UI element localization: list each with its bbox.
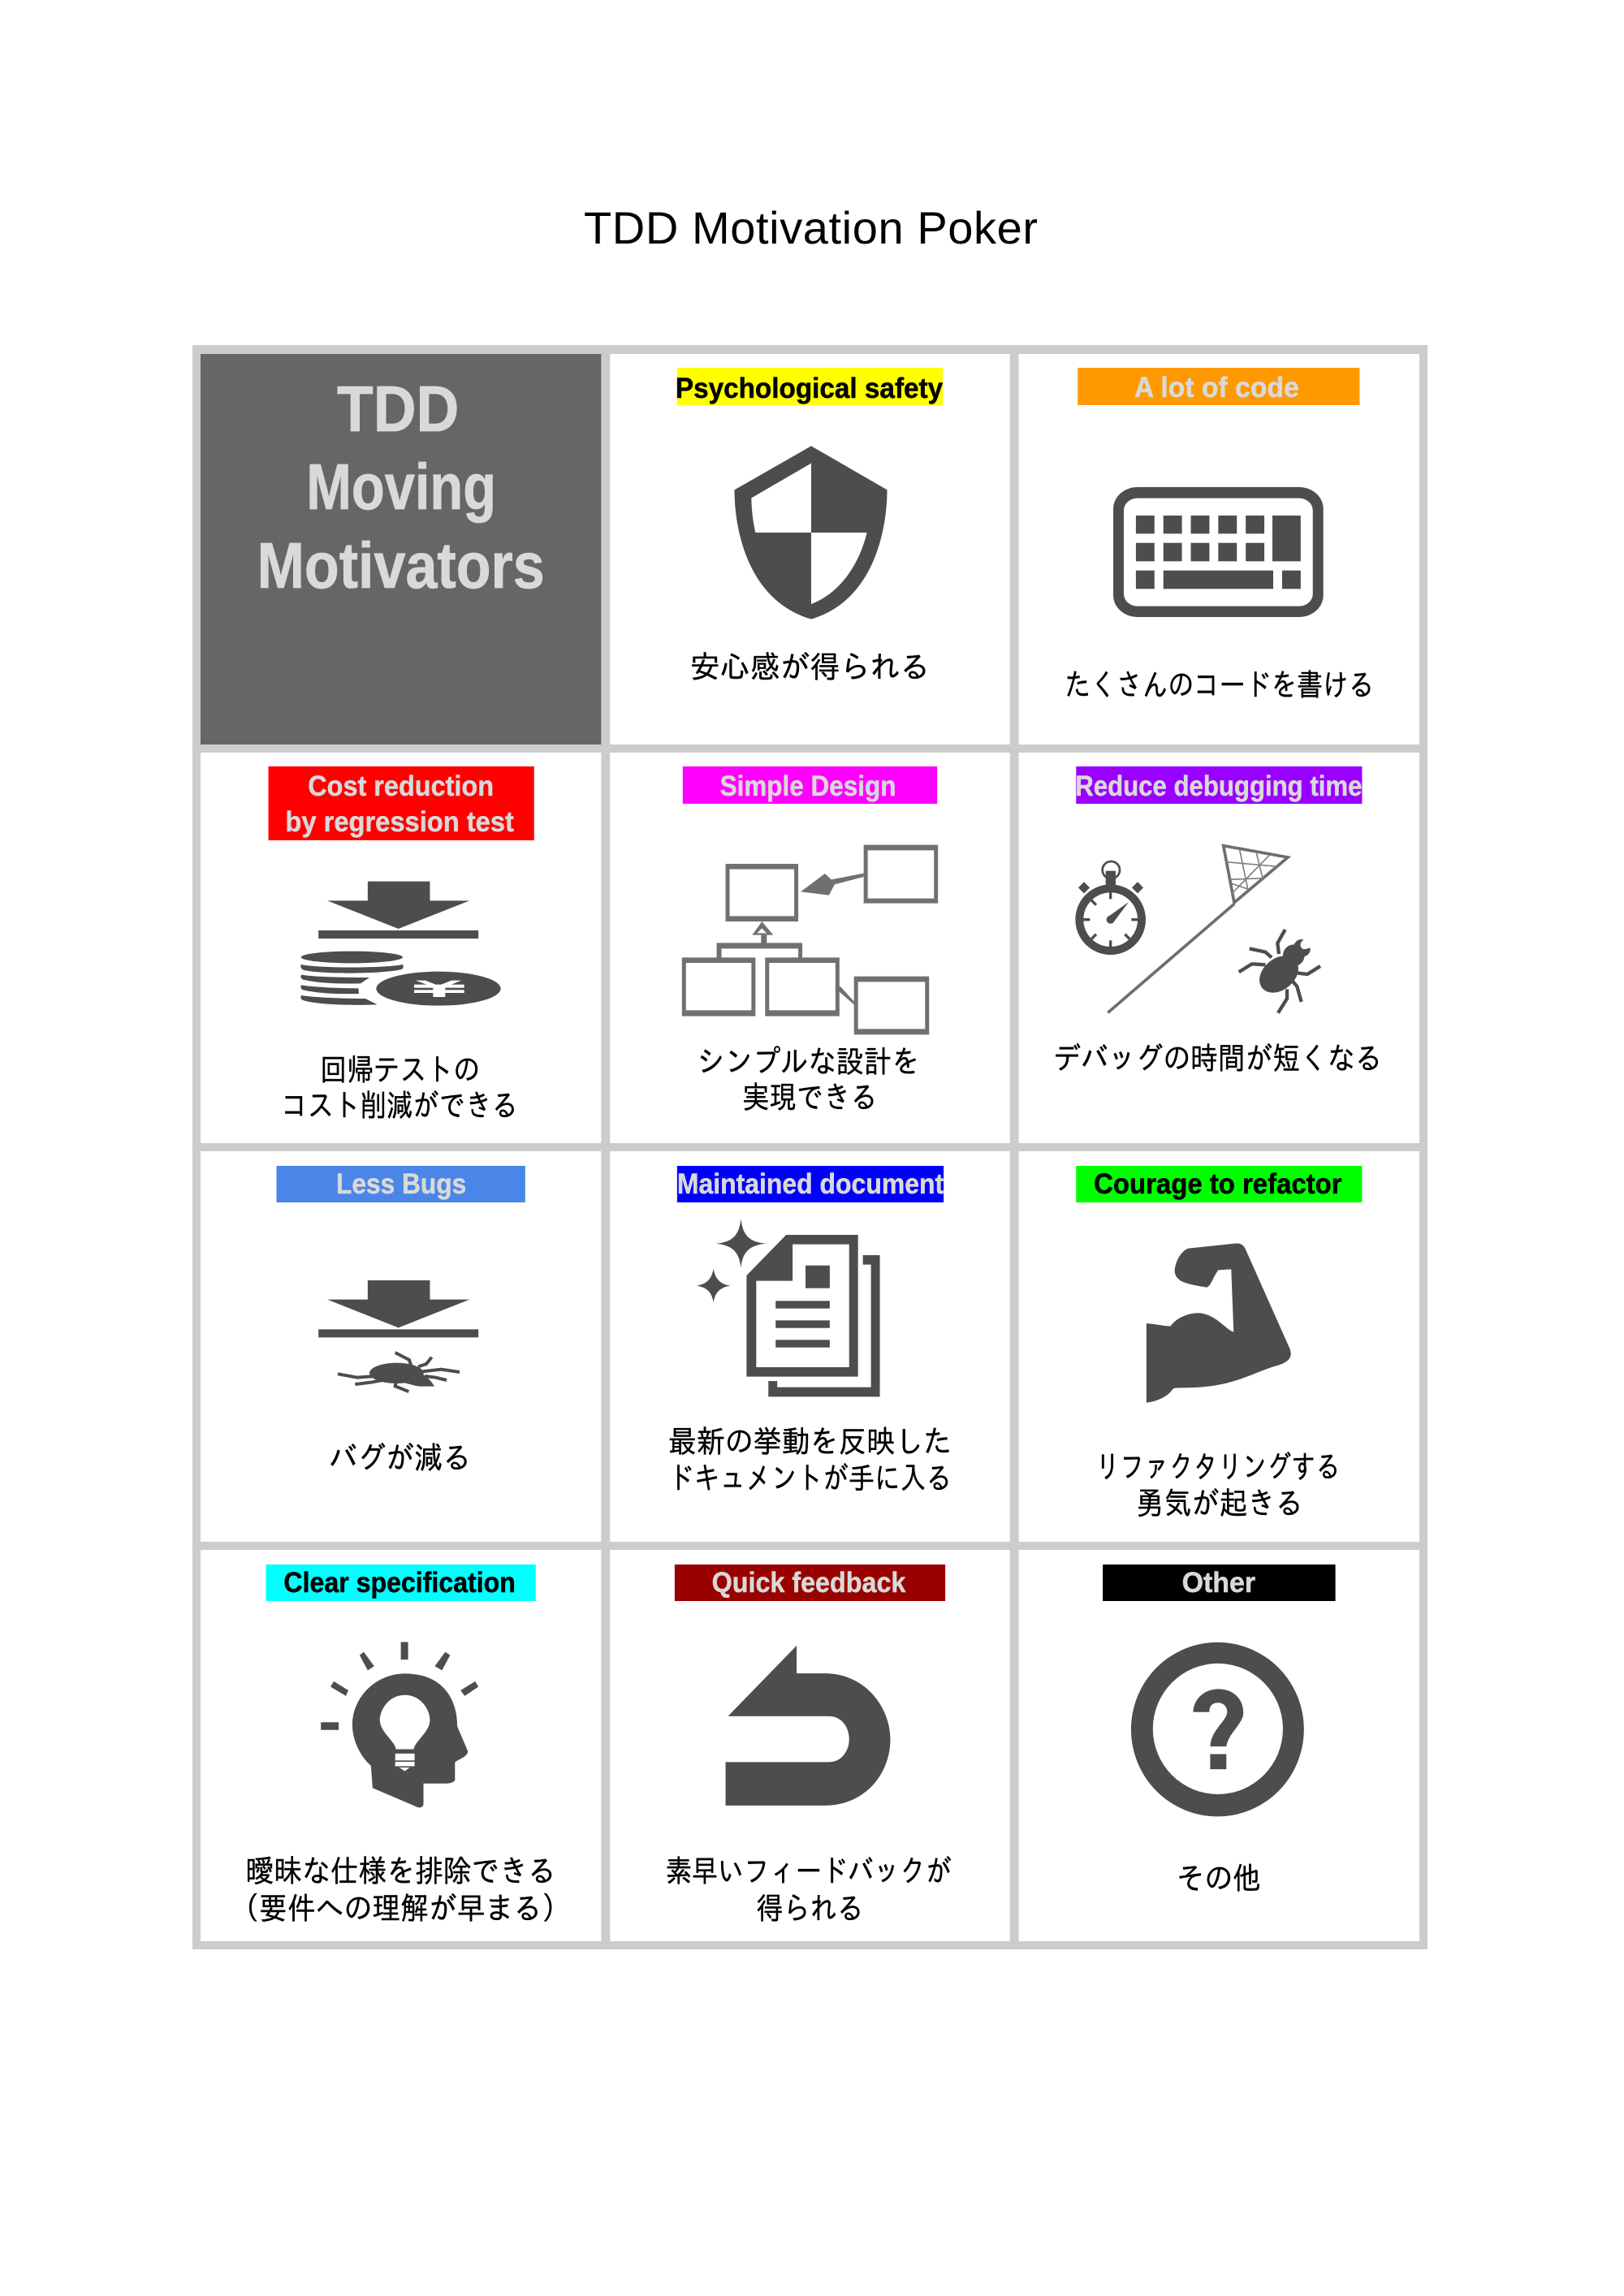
caption: 実現できる bbox=[742, 1081, 878, 1112]
label: Other: Other bbox=[1182, 1567, 1256, 1599]
bug bbox=[1239, 930, 1320, 1013]
caption: 安心感が得られる bbox=[690, 651, 930, 682]
panel: Cost reduction by regression test bbox=[201, 753, 601, 1143]
label: Maintained document: Maintained document bbox=[677, 1168, 944, 1200]
icon: down arrow onto bug bbox=[318, 1280, 478, 1392]
caption: その他 bbox=[1177, 1862, 1261, 1893]
panel: TDD Moving Motivators heading card bbox=[201, 354, 601, 744]
caption: (要件への理解が早まる) bbox=[245, 1892, 556, 1923]
caption bbox=[698, 1046, 919, 1112]
label: Other bbox=[1103, 1564, 1336, 1601]
label: Cost reduction by regression test: by regression test bbox=[285, 806, 514, 838]
title: TDD Motivation Poker bbox=[584, 202, 1038, 253]
panel: Other bbox=[1019, 1550, 1419, 1941]
icon: shield bbox=[734, 446, 888, 619]
caption: デバッグの時間が短くなる bbox=[1053, 1042, 1382, 1073]
caption: 勇気が起きる bbox=[1136, 1487, 1303, 1518]
panel: Psychological safety bbox=[610, 354, 1010, 744]
label: A lot of code: A lot of code bbox=[1134, 372, 1299, 404]
icon: down arrow onto coins bbox=[300, 882, 501, 1006]
heading: TDD Moving Motivators bbox=[257, 373, 545, 602]
caption: 得られる bbox=[756, 1892, 864, 1923]
caption: ドキュメントが手に入る bbox=[668, 1462, 952, 1493]
panel: Reduce debugging time bbox=[1019, 753, 1419, 1143]
label: Cost reduction by regression test bbox=[269, 766, 534, 840]
icon: return arrow bbox=[726, 1646, 890, 1806]
caption: 曖昧な仕様を排除できる bbox=[246, 1855, 556, 1886]
panel: Less Bugs bbox=[201, 1151, 601, 1542]
icon: keyboard bbox=[1113, 487, 1324, 617]
caption: 素早いフィードバックが bbox=[666, 1855, 952, 1886]
panel: A lot of code bbox=[1019, 354, 1419, 744]
label: Less Bugs bbox=[276, 1166, 525, 1202]
label: Clear specification: Clear specification bbox=[283, 1567, 516, 1599]
caption bbox=[668, 1426, 952, 1493]
label: Less Bugs: Less Bugs bbox=[336, 1168, 466, 1200]
stopwatch bbox=[1078, 861, 1143, 951]
label: Quick feedback: Quick feedback bbox=[712, 1567, 906, 1599]
icon: flexed arm bbox=[1147, 1243, 1291, 1403]
icon: head with light bulb bbox=[321, 1642, 478, 1807]
caption: コスト削減ができる bbox=[281, 1090, 518, 1120]
caption bbox=[1095, 1451, 1341, 1518]
icon: sparkling document bbox=[697, 1219, 880, 1396]
panel: Maintained document bbox=[610, 1151, 1010, 1542]
caption: リファクタリングする bbox=[1095, 1451, 1341, 1482]
label: Courage to refactor: Courage to refactor bbox=[1094, 1168, 1342, 1200]
bug net bbox=[1108, 846, 1288, 1012]
panel: Simple Design bbox=[610, 753, 1010, 1143]
card grid bbox=[192, 345, 1427, 1949]
panel: Courage to refactor bbox=[1019, 1151, 1419, 1542]
heading: TDD Moving Motivators: Moving bbox=[306, 451, 496, 523]
panel: Quick feedback bbox=[610, 1550, 1010, 1941]
label: Psychological safety: Psychological safety bbox=[676, 373, 944, 404]
heading: TDD Moving Motivators: Motivators bbox=[257, 529, 545, 602]
label: Simple Design: Simple Design bbox=[720, 770, 896, 802]
caption bbox=[245, 1855, 556, 1923]
label: A lot of code bbox=[1078, 368, 1359, 405]
label: Simple Design bbox=[683, 766, 937, 804]
icon: stopwatch, net and bug bbox=[1078, 846, 1320, 1013]
icon: class diagram boxes bbox=[682, 845, 938, 1034]
caption: バグが減る bbox=[329, 1442, 471, 1473]
caption: 最新の挙動を反映した bbox=[668, 1426, 952, 1457]
caption: 回帰テストの bbox=[320, 1054, 480, 1085]
label: Cost reduction by regression test: Cost reduction bbox=[308, 770, 494, 802]
caption bbox=[666, 1855, 952, 1923]
panel: Clear specification bbox=[201, 1550, 601, 1941]
icon: question mark in circle bbox=[1131, 1642, 1304, 1816]
caption: たくさんのコードを書ける bbox=[1065, 669, 1374, 700]
label: Reduce debugging time: Reduce debugging time bbox=[1075, 770, 1362, 802]
caption: シンプルな設計を bbox=[698, 1046, 919, 1077]
heading: TDD Moving Motivators: TDD bbox=[337, 373, 459, 445]
label: Quick feedback bbox=[675, 1564, 945, 1601]
caption bbox=[281, 1054, 518, 1120]
